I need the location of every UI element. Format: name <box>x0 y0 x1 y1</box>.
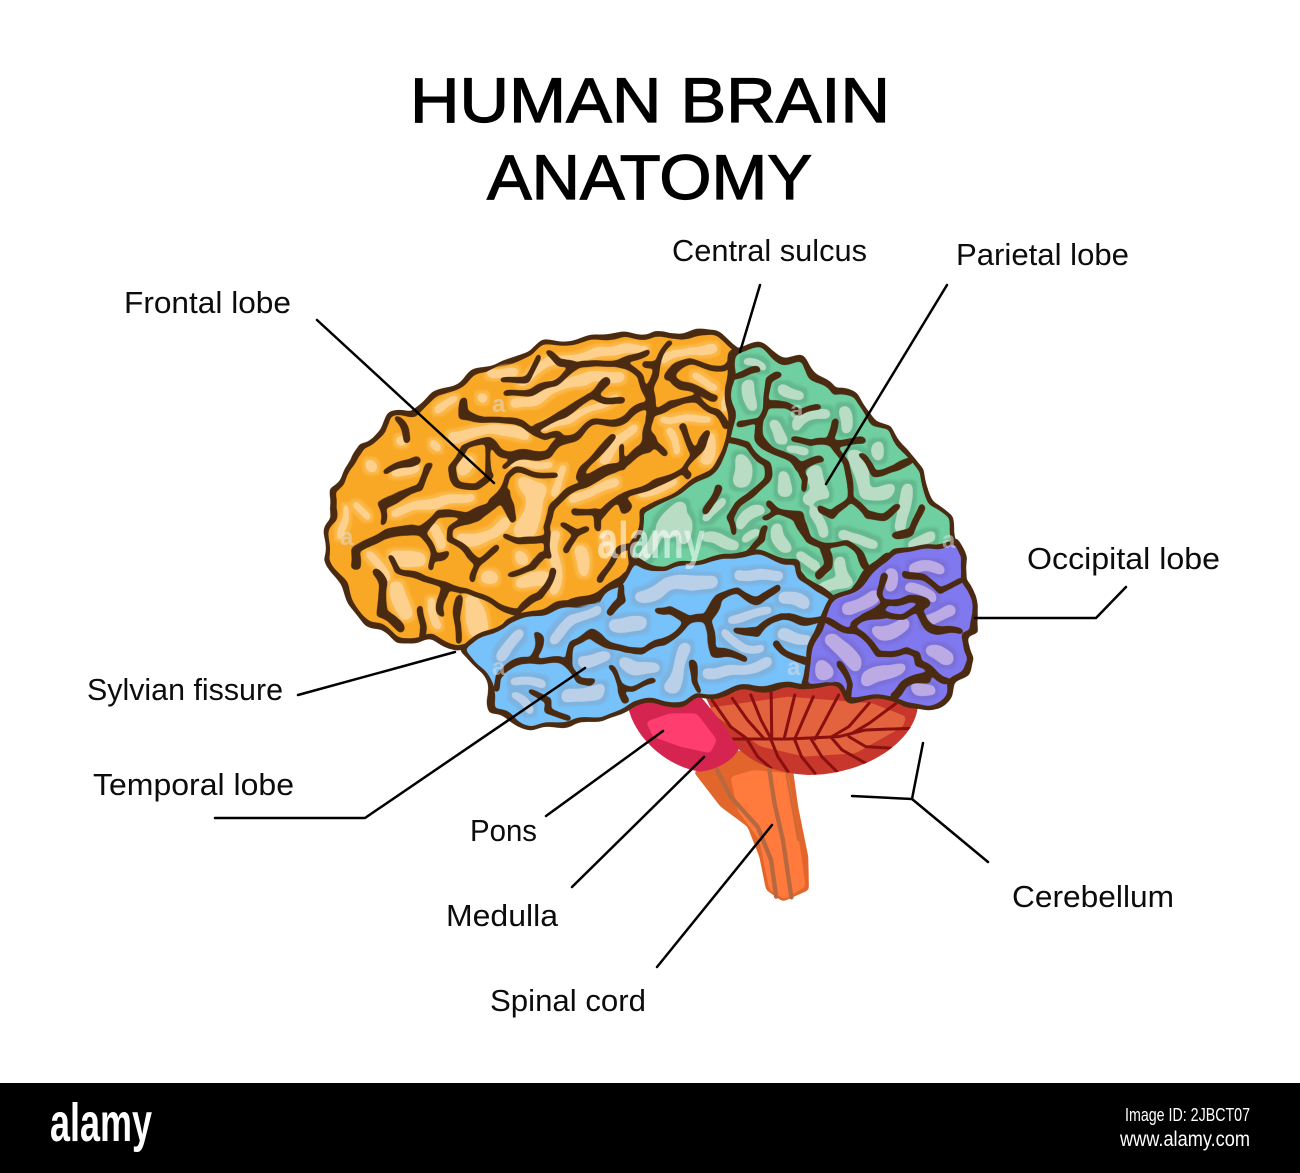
watermark: a <box>942 527 956 554</box>
parietal lobe <box>633 350 955 603</box>
label: pons: Pons <box>470 813 537 848</box>
spinal cord and medulla <box>693 750 809 902</box>
frontal lobe leader <box>317 320 494 483</box>
frontal lobe <box>328 335 737 645</box>
label: temporal lobe: Temporal lobe <box>93 767 294 802</box>
footer bar <box>0 1083 1300 1173</box>
label: central sulcus: Central sulcus <box>672 233 867 268</box>
spinal cord leader <box>657 825 772 967</box>
watermark: a <box>492 654 506 681</box>
watermark: a <box>340 524 354 551</box>
occipital lobe leader <box>975 587 1126 618</box>
watermark: a <box>787 654 801 681</box>
label: occipital lobe: Occipital lobe <box>1027 541 1220 576</box>
central sulcus leader <box>740 285 760 352</box>
cerebellum leader <box>852 743 988 862</box>
pons leader <box>546 731 663 816</box>
parietal lobe leader <box>826 285 947 484</box>
occipital lobe <box>805 543 972 707</box>
image id: Image ID: 2JBCT07 <box>1125 1105 1250 1125</box>
labels <box>87 233 1220 1018</box>
temporal lobe <box>464 558 832 725</box>
label: parietal lobe: Parietal lobe <box>956 237 1129 272</box>
watermark: alamy <box>597 512 705 570</box>
sylvian fissure leader <box>298 652 455 695</box>
seam between frontal and temporal lobes <box>520 565 640 640</box>
leader lines <box>215 285 1126 967</box>
title: HUMAN BRAIN <box>410 66 890 136</box>
website: www.alamy.com <box>1119 1128 1250 1151</box>
brain illustration <box>328 335 972 902</box>
temporal lobe leader <box>215 668 585 818</box>
watermark <box>340 391 956 681</box>
title: ANATOMY <box>487 143 812 213</box>
cerebellum <box>706 686 918 775</box>
medulla leader <box>572 757 704 887</box>
label: cerebellum: Cerebellum <box>1012 879 1174 914</box>
label: medulla: Medulla <box>446 898 559 933</box>
watermark: a <box>790 397 804 424</box>
footer logo: alamy <box>50 1093 152 1153</box>
label: frontal lobe: Frontal lobe <box>124 285 291 320</box>
label: sylvian fissure: Sylvian fissure <box>87 672 283 707</box>
label: spinal cord: Spinal cord <box>490 983 646 1018</box>
pons <box>627 692 739 772</box>
title <box>410 66 890 213</box>
watermark: a <box>492 391 506 418</box>
